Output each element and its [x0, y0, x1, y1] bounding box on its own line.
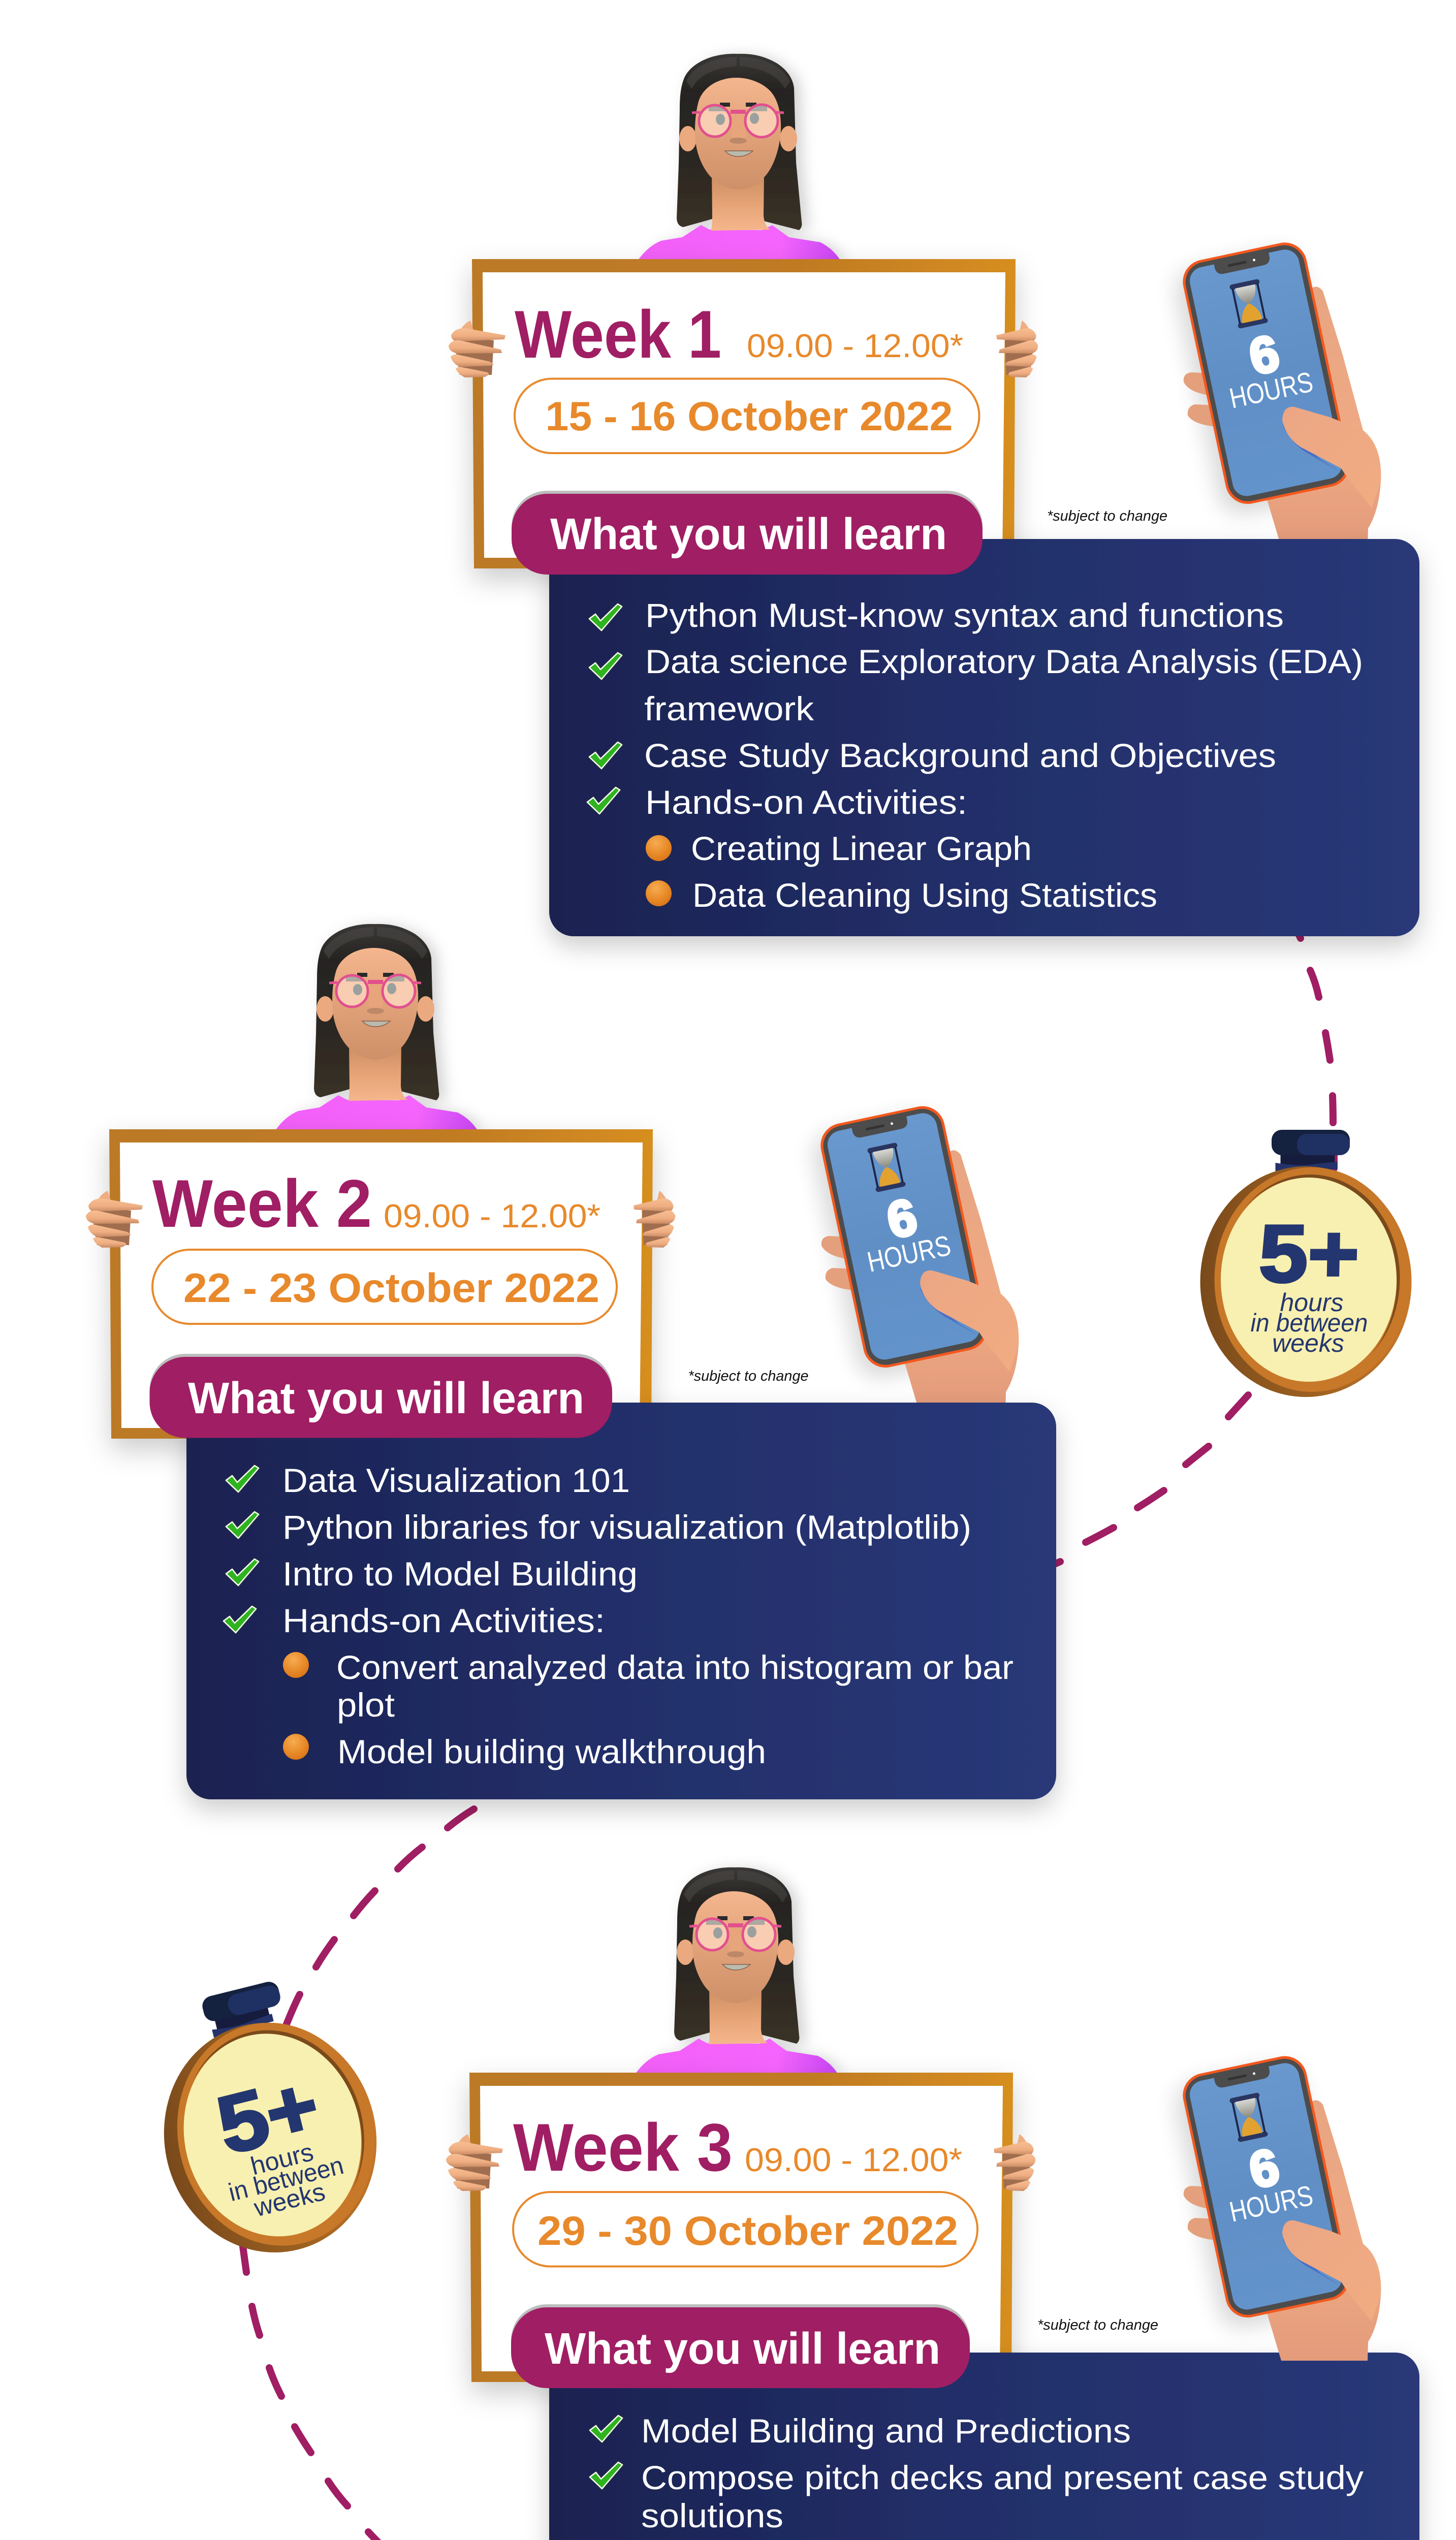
date pill: week 1: 15 - 16 October 2022 [546, 394, 953, 439]
label hours: HOURS [1226, 2179, 1316, 2228]
number 5+: 5+ [208, 2059, 328, 2171]
date pill: week 2 [152, 1250, 617, 1324]
week 2 section [86, 924, 1056, 1799]
panel: week 3 topics [549, 2353, 1419, 2540]
caption: weeks [1272, 1329, 1344, 1357]
dashed connector line: week 1 to week 2 [1047, 930, 1334, 1568]
check icons [224, 1466, 259, 1633]
topic list [282, 1462, 1014, 1770]
pill: what you will learn, week 3: What you will learn [545, 2324, 940, 2373]
number 6: 6 [882, 1188, 922, 1250]
number 6: 6 [1245, 2138, 1284, 2200]
dashed connector line: week 2 to week 3 [241, 1809, 559, 2540]
topic list [641, 2412, 1364, 2540]
woman holding week 2 board [86, 924, 675, 1439]
phone with hand: 6 hours [810, 1102, 1019, 1411]
topic list: plot [337, 1686, 395, 1724]
caption [226, 2138, 346, 2222]
woman holding week 3 board [446, 1867, 1035, 2382]
note: subject to change: *subject to change [1047, 508, 1167, 524]
date pill: week 3: 29 - 30 October 2022 [537, 2208, 958, 2254]
topic list: Hands-on Activities: [645, 783, 967, 821]
caption: weeks [250, 2177, 328, 2222]
caption: in between [226, 2151, 346, 2207]
phone with hand: 6 hours [1173, 2052, 1381, 2361]
topic list: Compose pitch decks and present case study [641, 2459, 1364, 2496]
panel: week 1 topics [549, 539, 1419, 936]
number 5+: 5+ [1258, 1208, 1360, 1299]
pill: what you will learn, week 1 [512, 491, 983, 575]
label hours: HOURS [1226, 365, 1316, 415]
time: week 2: 09.00 - 12.00* [384, 1197, 600, 1234]
week 1 section [449, 54, 1419, 936]
topic list: Python libraries for visualization (Matplotlib) [282, 1508, 971, 1546]
stopwatch: between week 2 and 3 [131, 1965, 401, 2275]
bullet icons [283, 1652, 309, 1760]
caption: in between [1251, 1309, 1368, 1337]
caption: hours [1280, 1288, 1344, 1317]
week 3 section [446, 1867, 1419, 2540]
check icons [587, 604, 622, 814]
pill: what you will learn, week 3 [511, 2304, 970, 2388]
topic list: framework [644, 690, 814, 727]
bullet icons [646, 835, 672, 906]
topic list: Hands-on Activities: [282, 1602, 605, 1639]
note: subject to change: *subject to change [688, 1368, 809, 1384]
caption: hours [248, 2138, 316, 2180]
time: week 1: 09.00 - 12.00* [747, 327, 963, 364]
topic list: Case Study Background and Objectives [644, 737, 1276, 774]
topic list: Data science Exploratory Data Analysis (EDA) [645, 643, 1363, 680]
woman holding week 1 board [449, 54, 1038, 568]
time: week 3: 09.00 - 12.00* [745, 2141, 962, 2178]
number 6: 6 [1245, 324, 1284, 386]
stopwatch: between week 1 and 2 [1200, 1130, 1411, 1397]
date pill: week 1 [515, 379, 979, 453]
topic list: Data Visualization 101 [282, 1462, 630, 1499]
topic list: solutions [641, 2497, 783, 2534]
panel: week 2 topics [186, 1403, 1056, 1799]
pill: what you will learn, week 2 [149, 1354, 612, 1438]
caption [1251, 1288, 1368, 1357]
check icons [587, 2416, 622, 2540]
heading: week 3: Week 3 [513, 2110, 733, 2185]
date pill: week 3 [513, 2192, 977, 2267]
topic list [644, 596, 1363, 914]
heading: week 1: Week 1 [515, 297, 721, 372]
topic list: Intro to Model Building [282, 1555, 638, 1593]
heading: week 2: Week 2 [152, 1166, 372, 1242]
topic list: Convert analyzed data into histogram or bar [336, 1648, 1014, 1686]
topic list: Creating Linear Graph [691, 830, 1032, 867]
pill: what you will learn, week 1: What you will learn [550, 510, 947, 559]
topic list: Python Must-know syntax and functions [645, 596, 1284, 634]
pill: what you will learn, week 2: What you will learn [188, 1374, 584, 1423]
topic list: Model building walkthrough [337, 1733, 766, 1770]
date pill: week 2: 22 - 23 October 2022 [183, 1265, 599, 1311]
topic list: Data Cleaning Using Statistics [692, 876, 1157, 914]
phone with hand: 6 hours [1173, 238, 1381, 547]
note: subject to change: *subject to change [1037, 2317, 1158, 2333]
label hours: HOURS [864, 1229, 954, 1278]
topic list: Model Building and Predictions [641, 2412, 1131, 2450]
